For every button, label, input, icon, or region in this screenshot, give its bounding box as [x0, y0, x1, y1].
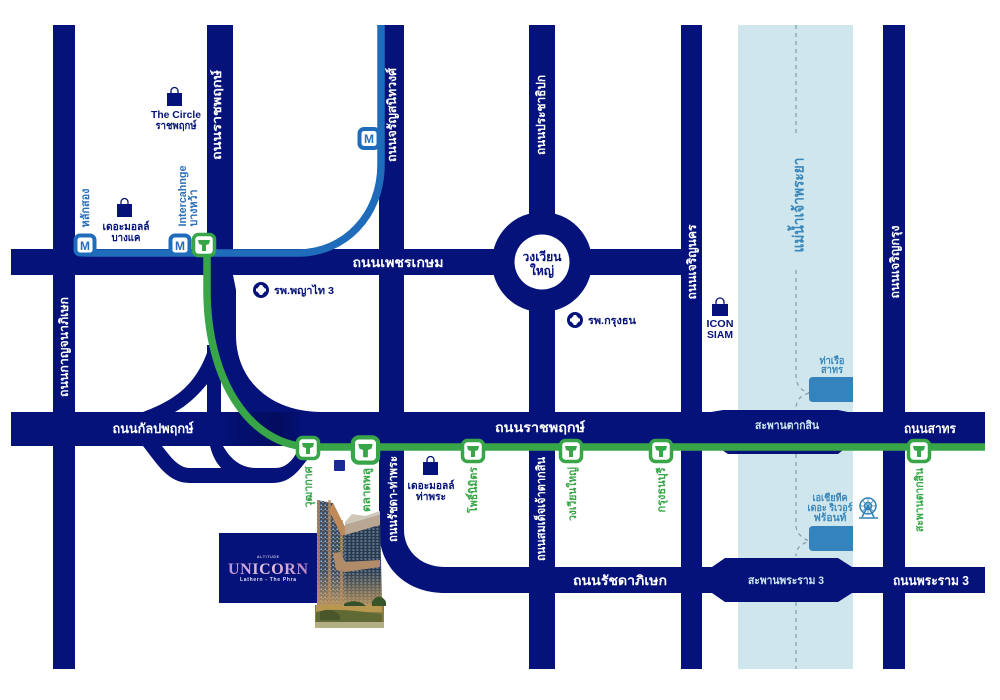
green station labels: วุฒากาศ — [303, 466, 316, 508]
shopping mall: The Mall Thapra — [408, 456, 454, 503]
road labels vertical: ถนนรัชดา-ท่าพระ — [386, 456, 400, 542]
hospital: Krungthon — [569, 314, 637, 328]
shopping mall: Icon Siam: SIAM — [707, 329, 733, 341]
road labels vertical: ถนนกาญจนาภิเษก — [57, 297, 71, 397]
panel: Unicorn logo: ALTITUDE — [257, 555, 280, 559]
shopping mall: Icon Siam — [706, 298, 734, 341]
road labels horizontal — [112, 255, 969, 588]
blue metro stations: M — [364, 132, 374, 146]
road labels vertical: ถนนราชพฤกษ์ — [210, 70, 224, 160]
road labels horizontal: ถนนราชพฤกษ์ — [495, 420, 585, 435]
pier: Sathorn: สาทร — [821, 365, 844, 376]
panel: Unicorn logo: Lathern - The Phra — [240, 577, 296, 583]
hospital: Phyathai 3: รพ.พญาไท 3 — [274, 284, 334, 297]
interchange shadow — [215, 412, 300, 446]
pier: Sathorn — [809, 355, 853, 402]
road labels horizontal: สะพานตากสิน — [755, 419, 819, 432]
green station labels: โพธิ์นิมิตร — [465, 467, 480, 514]
project marker — [334, 460, 345, 471]
river label: แม่น้ำเจ้าพระยา — [786, 158, 807, 252]
pier: Asiatique — [808, 492, 853, 551]
blue station labels: หลักสอง — [79, 188, 92, 228]
road labels horizontal: ถนนรัชดาภิเษก — [573, 573, 667, 588]
blue metro stations — [76, 129, 378, 254]
blue metro stations: M — [80, 239, 90, 253]
shopping mall: Icon Siam: ICON — [706, 318, 734, 330]
road labels horizontal: สะพานพระราม 3 — [748, 575, 824, 587]
road labels horizontal: ถนนพระราม 3 — [893, 573, 969, 588]
icon: ferris wheel — [859, 498, 878, 518]
blue metro stations: M — [175, 239, 185, 253]
pier: Asiatique: ฟร้อนท์ — [814, 512, 847, 524]
panel: Unicorn logo: UNICORN — [228, 561, 308, 578]
hospital: Phyathai 3 — [255, 284, 334, 297]
blue station labels: บางหว้า — [187, 190, 200, 226]
road labels vertical: ถนนสมเด็จเจ้าตากสิน — [533, 456, 548, 561]
road labels vertical: ถนนเจริญนคร — [685, 224, 699, 300]
road labels horizontal: ถนนกัลปพฤกษ์ — [112, 421, 194, 436]
road labels vertical: ถนนจรัญสนิทวงศ์ — [385, 68, 399, 162]
project building — [315, 500, 386, 628]
shopping mall: The Mall Thapra: เดอะมอลล์ — [408, 479, 454, 492]
roundabout: วงเวียน — [522, 250, 562, 264]
pier: Asiatique: เดอะ ริเวอร์ — [808, 502, 853, 514]
shopping mall: The Mall Thapra: ท่าพระ — [416, 491, 446, 503]
hospital: Krungthon: รพ.กรุงธน — [588, 315, 637, 328]
green station markers — [194, 234, 930, 463]
green station labels — [303, 466, 926, 532]
road labels vertical: ถนนประชาธิปก — [534, 75, 548, 155]
pier: Sathorn: ท่าเรือ — [820, 355, 844, 367]
shopping mall: The Circle — [151, 88, 201, 132]
shopping mall: The Mall Bangkae: เดอะมอลล์ — [102, 220, 150, 233]
roundabout: ใหญ่ — [530, 263, 554, 278]
road labels vertical: ถนนเจริญกรุง — [888, 225, 903, 298]
green station labels: สะพานตากสิน — [913, 468, 926, 532]
river — [738, 25, 853, 669]
panel: Unicorn logo — [219, 533, 319, 603]
green BTS line — [207, 250, 985, 447]
shopping mall: The Circle: The Circle — [151, 109, 201, 121]
road labels horizontal: ถนนเพชรเกษม — [352, 255, 444, 270]
green station labels: ตลาดพลู — [361, 468, 374, 512]
blue metro line — [85, 25, 381, 253]
green station labels: กรุงธนบุรี — [655, 467, 669, 512]
road labels vertical — [57, 68, 903, 561]
green station labels: วงเวียนใหญ่ — [565, 467, 579, 521]
blue station labels: Intercahnge — [177, 166, 189, 226]
pier: Asiatique: เอเชียทีค — [812, 492, 848, 504]
road labels horizontal: ถนนสาทร — [904, 421, 956, 436]
shopping mall: The Mall Bangkae — [102, 198, 150, 244]
roundabout — [492, 212, 592, 312]
shopping mall: The Mall Bangkae: บางแค — [112, 232, 140, 244]
blue station labels — [79, 166, 200, 228]
shopping mall: The Circle: ราชพฤกษ์ — [156, 119, 197, 132]
